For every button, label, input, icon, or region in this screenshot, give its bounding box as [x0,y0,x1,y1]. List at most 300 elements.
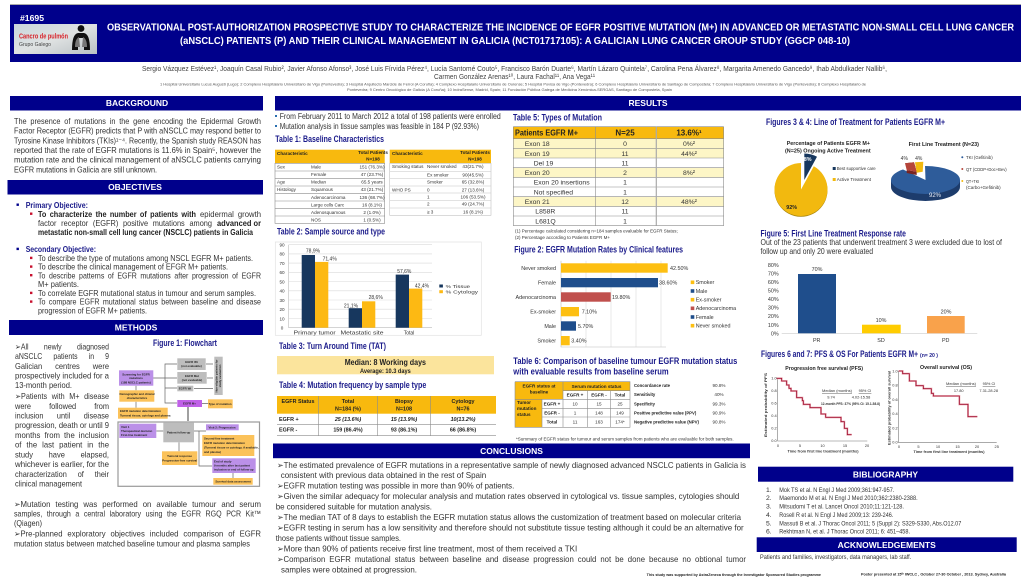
legend [833,166,876,182]
line chart: progression free survival: 5 [799,443,801,448]
table 1 left: 1 (0.5%) [363,218,381,222]
legend: % Tissue [446,284,471,289]
table 1 right: Ex smoker [427,173,449,178]
table 6 statistics: Negative predictive value (NPV) [634,419,699,424]
flow box: second-line: EGFR mutation determination [204,441,245,445]
table 4: Total [342,399,355,405]
table 1 left: Median [311,180,327,185]
text block: background: EGFR mutations in Galicia are still unknown. [14,164,157,174]
flow box: survival data [213,478,253,485]
pie chart: first line treatment: First Line Treatment (N=23) [909,142,979,148]
line chart: progression free survival: 0 [777,443,780,448]
bar chart: response rate: 50% [768,289,779,295]
bar: PD: 20% [941,310,952,316]
category labels: Metastatic site [340,330,384,336]
flow box: visit 1 [119,424,156,438]
flow box: visit 1: First-line treatment [121,433,147,437]
title: (aNSCLC) PATIENTS (P) AND THEIR CLINICAL MANAGEMENT IN GALICIA (NCT01717105): A GALICIAN LUNG CANCER GROUP STUDY (GGCP 048-10) [180,35,850,47]
flow box: visit 2 [206,424,239,430]
text block: bibliography: 2. [766,495,772,502]
text block: conclusions: ➢The median TAT of 8 days to establish the EGFR mutation status allows the customization of treatment based on molecular criteria [277,512,741,522]
flow box: second-line: Second-line treatment [204,436,234,440]
table 6: EGFR + [567,392,584,398]
table 4: 15 (13.9%) [391,417,417,423]
table 5: L681Q [535,218,556,225]
table 5: Del 19 [534,160,554,167]
line chart: overall survival: 25 [995,444,999,449]
table 1 left: Adenosquamous [311,210,346,215]
line chart: progression free survival: Estimated probability of PFS [763,373,768,437]
text block: bibliography: Mitsudomi T et al. Lancet Oncol 2010;11:121-128. [779,504,904,511]
legend [691,280,736,330]
table 5: 11 [621,209,629,216]
table 6: 15 [596,402,602,407]
line chart: overall survival: 0.8 [892,383,898,388]
flowchart diagram [118,357,260,486]
bar chart: response rate: 20% [768,314,779,320]
value labels: 21,1% [344,304,359,310]
heading: figure 5: Figure 5: First Line Treatment Response rate [760,228,906,238]
pie chart: ongoing active treatment: Percentage of Patients EGFR M+ [787,141,870,147]
table 1 right: 27 (13.6%) [462,187,485,192]
heading: table 1: Table 1: Baseline Characteristics [275,134,384,144]
heading: bibliography [758,467,1013,482]
text block: background: reported that the rate of EGFR mutations is 11.6% in Spain⁵, however the [14,145,261,155]
flow box: EGFR Wt short: EGFR Wt [179,387,191,391]
follow-up frame [118,422,260,486]
table 1 left: 47 (23.7%) [361,172,384,177]
text block: objectives [16,201,262,316]
text block: methods left column: ➢Patients with M+ disease [15,391,109,401]
heading: table 3: Table 3: Turn Around Time (TAT) [279,341,386,351]
legend: Ex-smoker [696,298,722,304]
table 5: Exon 19 [525,151,550,158]
table 5: 0%² [683,141,696,148]
bar chart: response rate [768,263,977,344]
table 1 left: Squamous [311,187,334,192]
text block: methods lower: (Qiagen) [14,518,42,528]
line chart: overall survival: 15 [955,444,960,449]
line chart: overall survival: Overall survival (OS) [920,365,972,371]
flow box: screening: mutations [129,376,143,380]
table 1 right: 2 [427,202,430,207]
logo: Cancro de pulmón [14,24,97,54]
flow box: screening [119,370,153,386]
legend [439,284,479,295]
table 1 left: 2 (1.0%) [363,210,381,215]
flow box: EGFR M+ [177,400,202,407]
PFS annotation: Median (months) [822,388,853,393]
text block: methods lower: samples, through a central laboratory using the EGFR RGQ PCR Kit™ [14,508,261,518]
table 1 right: 0 [427,187,430,192]
survival curve: OS [899,371,977,417]
text block: bibliography: Maemondo M et al. N Engl J Med 2010;362:2380-2388. [779,495,918,502]
value labels: 28,6% [369,295,383,301]
category labels: Total [404,330,414,336]
flow box: EGFR M+: EGFR M+ [183,402,196,406]
primary objective: Primary Objective: [26,201,88,210]
table 4: Cytology [451,399,475,405]
table 1 right: Smoker [427,180,443,185]
text block: methods lower [14,499,261,548]
heading: table 6: with evaluable results from baseline serum [512,366,669,376]
bar: female: 38.60% [659,281,677,287]
text block: methods left column: were followed from [14,401,109,411]
bar: adenocarcinoma [516,292,630,302]
table 5 footnotes [515,228,678,240]
bar: SD: SD [877,338,885,344]
line chart: overall survival: 10 [936,444,941,449]
table 5: Exon 20 [525,170,550,177]
heading: background [10,96,263,110]
bar chart: response rate: 60% [768,280,779,286]
bar chart: response rate: 70% [768,272,779,278]
table 5 footnotes: (1) Percentage calculated considering n=184 samples evaluable for EGFR Status; [515,228,678,233]
table 1 right: 106 (53.5%) [460,194,486,199]
text block: results intro [275,112,501,131]
pie chart: ongoing active treatment: (N=25) Ongoing Active Treatment [785,149,871,155]
value labels [306,248,430,310]
text block: conclusions: ➢More than 90% of patients receive first line treatment, most of them received a TKI [277,544,577,554]
flow connectors [136,364,233,478]
primary objective: metastatic non-small cell lung cancer (NSCLC) patients in Galicia [38,227,253,237]
flow box: EGFR Wt: EGFR Wt [185,360,198,364]
bar: adenocarcinoma: Adenocarcinoma [516,295,556,301]
table 1 left: Characteristic [277,151,308,156]
bar: PR [798,267,836,344]
legend: Male [696,289,707,295]
heading: methods: METHODS [115,322,158,332]
table 5: N=25 [615,128,635,138]
text block: conclusions: ➢Comparison EGFR mutational status between baseline and disease progression could not be done because no obtional tumor [277,554,746,564]
bars: total [396,275,422,328]
flow box: demographics: characteristics [127,396,148,400]
legend: Active Treatment [837,177,872,182]
secondary objective [16,245,261,316]
bar: PD: PD [942,338,950,344]
table 6: Serum mutation status [572,384,622,389]
table 5: Exon 18 [525,141,550,148]
primary objective: factor receptor (EGFR) positive mutations among [38,218,212,228]
secondary objective: To describe patterns of EGFR mutations after progression of EGFR [38,270,261,280]
flow box: non-eligible [214,357,223,395]
text block: conclusions: ➢EGFR mutation testing was possible in more than 90% of patients. [277,480,514,490]
legend: Never smoked [696,324,730,330]
text block: methods left column: progression, death or until 9 [15,420,109,430]
primary objective: To characterize the number of patients with [38,209,196,219]
PFS annotation: 12-month PFS: 37% (95% CI: 15.1-58.8) [821,401,881,406]
line chart: overall survival: 5 [917,444,920,449]
bar: ex-smoker: 7.10% [582,310,597,316]
table 5: L858R [535,209,555,216]
table 5: 44%² [681,151,698,158]
bar: PR: 70% [812,267,823,273]
secondary objective: To compare EGFR mutational status between baseline and disease [38,297,261,307]
flow box: patient follow-up [163,422,194,442]
flow box: mutation determination [118,408,171,419]
line chart: overall survival: 0.6 [892,397,898,402]
line chart: progression free survival: Time from first line treatment (months) [788,448,859,454]
table 6 statistics: 99.3% [712,401,726,406]
table 5: Patients EGFR M+ [515,128,578,138]
table 5: 48%² [681,199,698,206]
flow box: patient follow-up: Patient follow-up [167,430,190,434]
heading: table 5: Table 5: Types of Mutation [513,112,602,122]
value labels: 71,4% [323,256,337,262]
heading: table 6 [512,356,737,376]
secondary objective: To describe the clinical management of EFGR M+ patients. [38,262,228,272]
table 6: mutation [517,406,537,411]
pie chart: first line treatment: 92% [929,193,942,199]
heading: figures 6 and 7: (n= 20 ) [920,353,938,359]
legend: Best supportive care [837,166,876,171]
axis labels: 70 [279,261,285,266]
line chart: overall survival: 0.0 [892,440,899,444]
secondary objective: To describe the type of mutations among NSCL EGFR M+ patients. [38,253,253,263]
table 5: 1 [623,218,627,225]
bar chart: response rate: 10% [768,323,779,329]
flow box: EGFR Wt short [177,386,193,391]
table 5: 1 [623,189,627,196]
bar: male [544,321,593,331]
table 1 left: Histology [277,187,297,192]
bar chart: response rate: 80% [768,263,779,269]
legend: Smoker [696,280,714,286]
table 4: EGFR Status [282,399,314,405]
table 1 left: Female [311,172,327,177]
bars: primary tumor [302,255,328,328]
text block: conclusions [276,460,746,574]
table 1 right: Smoking status [392,164,424,169]
table 4: Biopsy [395,399,413,405]
flow box: survival data: Survival data assessment [215,480,251,484]
table 1 left: Sex [277,164,286,170]
authors and affiliations: Carmen González Arenas¹⁰, Laura Fachal¹¹, Ana Vega¹¹ [434,72,595,81]
text block: background [14,116,261,174]
bar: never smoked: Never smoked [521,266,556,272]
text block: methods left column: whichever is earlier, for the [14,459,109,469]
PFS annotation [821,388,881,406]
table 5: 8%² [683,170,696,177]
table 5: Exon 21 [525,199,550,206]
bar: never smoked: 42.50% [670,266,688,272]
secondary objective: progression of EGFR M+ patients. [38,306,147,316]
text block: background: mutation rate and the clinical management of aNSCLC patients carrying [14,155,261,165]
text block: bibliography: Rekhtman N, et al. J Thorac Oncol 2011; 6: 451–458. [779,528,910,535]
heading: acknowledgements: ACKNOWLEDGEMENTS [838,540,936,550]
header banner [10,4,1021,62]
bar: male: 5.70% [578,324,593,330]
table 1 right: 49 (24.7%) [462,202,485,207]
table 1 left: 43 (21.7%) [361,187,384,192]
table 6: 149 [616,410,624,416]
table 6: EGFR + [544,402,561,407]
axis labels [279,242,285,330]
poster number: #1695 [20,13,44,23]
pie chart: first line treatment: 4% [901,156,908,162]
table 6: EGFR status at [523,384,556,388]
bar: SD [862,318,901,344]
bar: female: Female [538,281,556,287]
table 5: Exon 20 insertions [534,180,590,187]
table 1 right: N=198 [468,156,482,162]
OS annotation: 95% CI [983,381,995,386]
flow box: visit 1: Visit 1 [121,425,130,429]
value labels: 57,6% [397,269,412,275]
text block: methods left column [14,342,109,488]
axis labels: 0 [281,326,284,330]
legend: % Cytology [446,290,479,295]
table 1 right: Never smoked [427,164,457,169]
bar: PR: PR [813,338,821,344]
table 4: EGFR + [279,417,299,423]
legend: Female [696,315,714,321]
table 1 right: WHO PS [392,187,411,192]
table 6: Tumor [517,400,531,405]
table 1 left: 16 (8.1%) [362,202,382,207]
table 1 left: NOS [311,218,321,222]
text block: methods left column: characterization of their [15,469,109,479]
text block: methods lower: ➢Pre-planned exploratory objectives included comparison of EGFR [14,528,261,538]
line chart: progression free survival [763,366,881,454]
flow box: demographics: Demographic and clinical [119,392,155,396]
legend: QT+TKI [966,179,979,184]
bar chart: sample source and type [275,242,481,336]
text block: results intro: From February 2011 to March 2012 a total of 198 patients were enrolled [280,112,501,121]
line chart: progression free survival: 20 [865,443,870,448]
table 1 right: 43(21.7%) [462,164,484,169]
line chart: overall survival [886,365,999,454]
table 5: Not specified [534,189,573,196]
text block: figure 5 note: follow up and only 20 were evaluated [760,246,873,256]
authors and affiliations: Pontevedra; 9 Centro Oncológico de Galicia (A Coruña); 10 IndraSense, Madrid, Spain; 11 Fundación Pública Galega de Medicina Xenómica-SERGAS, Santiago de Compostela, Spain [347,88,672,92]
table 1 left: Total Patients [358,150,388,155]
pie chart: first line treatment: 4% [915,156,923,162]
line chart: overall survival: 20 [975,444,980,449]
axis labels: 10 [279,316,285,321]
line chart: progression free survival: 0.0 [771,438,778,443]
text block: methods left column: inclusion until disease [15,410,109,420]
table 4: EGFR - [279,428,297,434]
line chart: overall survival: 0.4 [892,411,899,416]
text block: acknowledgements: Patients and families, investigators, data managers, lab staff. [760,554,911,561]
bar: ex-smoker [530,307,597,316]
heading: acknowledgements [757,537,1017,552]
table 4: 93 (86.1%) [391,428,417,434]
table 6: 25 [617,402,623,407]
table 6: 174* [615,420,625,424]
line chart: progression free survival: 1.0 [771,376,778,380]
table 1 right: Characteristic [392,151,423,156]
flow box: demographics [119,390,155,402]
table 1 right: 90(45.5%) [462,173,484,178]
table 6 statistics: Sensitivity [634,392,656,397]
bar chart: response rate: 0% [771,331,779,337]
flow box: screening: (188 NSCLC patients) [121,380,151,384]
text block: figure 5 note [760,237,1003,256]
text block: methods lower: mutation status between matched baseline tumour and plasma samples [14,538,250,548]
text block: background: Tyrosine Kinase Inhibitors (TKIs)¹⁻⁴. Recently, the Spanish study REASON has [14,135,261,145]
table 5: 0 [623,141,627,148]
line chart: progression free survival: Progression free survival (PFS) [785,366,863,372]
line chart: overall survival: 1.0 [892,368,899,374]
footer: presentation note: Poster presented at 15ᵗʰ IWCLC , October 27-30 October , 2013. Sydney, Australia [861,572,1007,576]
bar: male: Male [544,324,556,330]
secondary objective: To correlate EGFR mutational status in tumour and serum samples. [38,288,256,298]
table 4: 25 (13.6%) [334,417,361,423]
bar: smoker: Smoker [537,339,556,345]
table 5: 13.6%¹ [676,128,702,138]
heading: table 4: Table 4: Mutation frequency by sample type [279,380,426,390]
heading: conclusions: CONCLUSIONS [480,446,543,456]
title [107,22,1014,47]
table 6 statistics: 40% [714,392,724,397]
callout: turn around time: Median: 8 Working days [345,358,426,367]
line chart: progression free survival: 0.4 [771,413,778,418]
flow box: mutation determination: Tumoral tissue, cytology and plasma [120,414,171,418]
flow box: tumoral response: Progression-free survival [162,458,197,462]
PFS annotation: 9.74 [827,394,836,400]
table 5: 12 [621,199,629,206]
text block: bibliography: 3. [766,504,772,511]
table 1 right: 16 (8.1%) [463,209,483,214]
text block: conclusions: ➢EGFR testing in serum has a low sensitivity and therefore should not substitute tissue testing although it could be an alternative for [277,523,744,533]
text block: bibliography [766,487,961,535]
heading: table 6: Table 6: Comparison of baseline tumour EGFR mutation status [513,356,737,366]
bar: smoker [537,336,587,345]
flow box: EGFR Mut [177,372,207,384]
pie chart: ongoing active treatment [774,141,876,217]
table 1 right: Total Patients [460,150,490,155]
flow box: EGFR Mut: (not evaluable) [182,378,202,382]
table 1 left: Age [277,180,286,185]
table 5: 1 [623,180,627,187]
table 1 right: 65 (32.8%) [462,180,485,185]
bar: ex-smoker: Ex-smoker [530,310,556,316]
PFS annotation: 4.02-15.58 [852,394,870,400]
table 1 left: Adenocarcinoma [311,195,346,200]
flow box: tumoral response [162,451,197,465]
category labels: Primary tumor [294,330,336,336]
heading: figure 2: Figure 2: EGFR Mutation Rates by Clinical features [514,244,683,254]
primary objective: advanced or [217,218,262,228]
flow box: mutation determination: EGFR mutation determination [120,409,161,413]
logo: Cancro de pulmón: Cancro de pulmón [19,34,68,40]
table 6 [515,382,630,427]
text block: conclusions: those patients without tissue samples. [276,533,401,543]
authors and affiliations: 1 Hospital Universitario Lucus Augusti (Lugo); 2 Complexo Hospitalario Universitario de Vigo (Pontevedra); 3 Hospital Arquitecto Marcide de Ferrol (A Coruña); 4 Complexo Hospitalario Universitario de Ourense; 5 Hospital Povisa de Vigo (Pontevedra); 6 Complexo Hospitalario Universitario de Santiago de Compostela; 7 Complexo Hospitalario Universitario de Vigo (Pontevedra); 8 Complexo Hospitalario de [160,83,866,87]
heading: figures 3 and 4: Figures 3 & 4: Line of Treatment for Patients EGFR M+ [766,117,945,127]
table 5 [513,127,724,226]
table 1 right: 1 [427,194,430,199]
text block: conclusions: ➢The estimated prevalence of EGFR mutations in a representative sample of newly diagnosed advanced NSCLC patients in Galicia is [277,460,746,470]
table 4: N=108 [396,407,412,413]
callout: turn around time [277,356,494,375]
heading: table 2: Table 2: Sample source and type [277,226,385,236]
PFS annotation: 95% CI [859,388,871,393]
flow box: type of mutation: Type of mutation [208,402,232,406]
table 5: 2 [623,170,627,177]
bar: female [538,278,677,287]
logo: Cancro de pulmón: Grupo Galego [19,42,51,48]
table 6: 148 [595,410,603,416]
flow box: second-line: and plasma) [204,450,221,454]
table 6 statistics: Positive predictive value (PPV) [634,410,697,415]
text block: conclusions: ➢Given the similar adequacy for molecular analysis and mutation rates observed in cytological vs. tissue samples, cytologies should [277,491,740,501]
callout: turn around time: Average: 10.3 days [360,369,411,375]
text block: methods left column: ➢All newly diagnosed [15,342,109,352]
text block: bibliography: 6. [766,528,772,535]
